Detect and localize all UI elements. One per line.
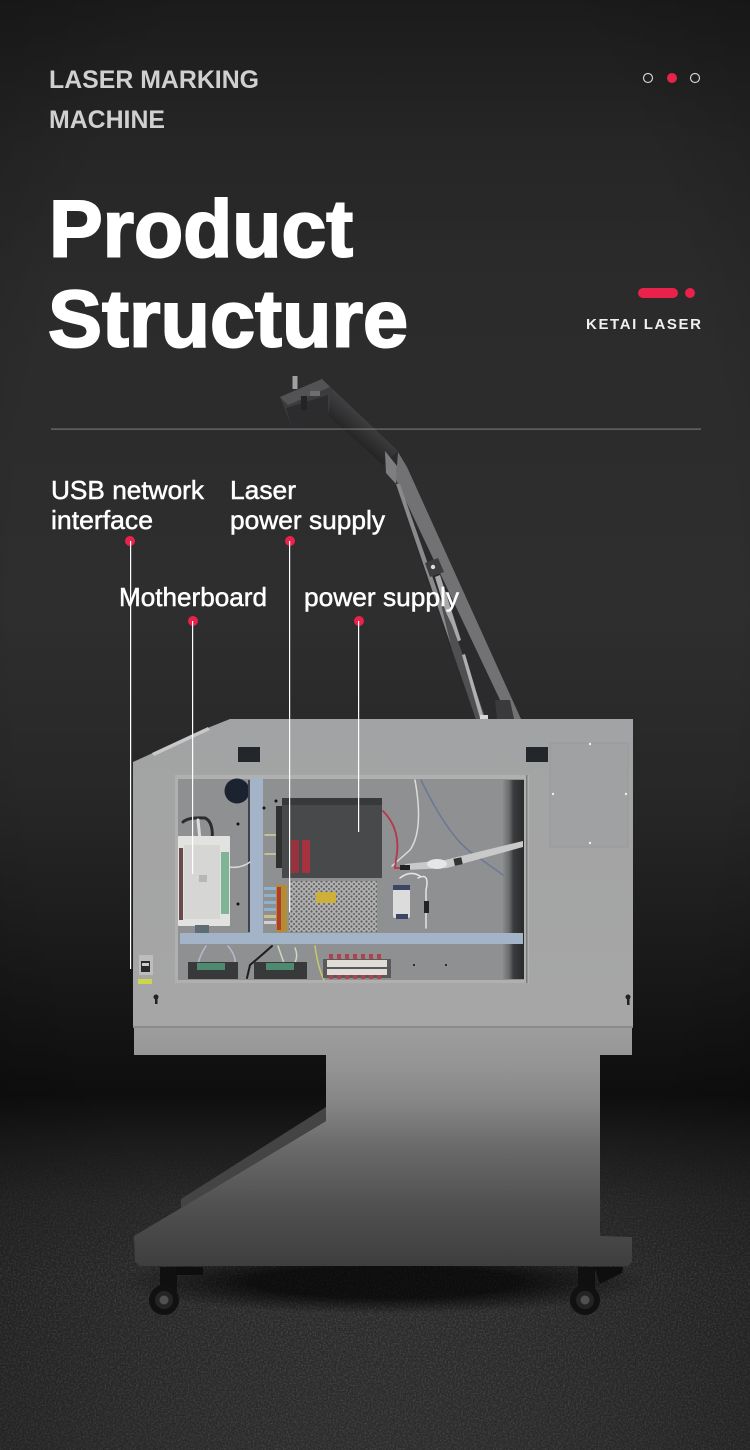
small driver module — [393, 885, 429, 919]
laser power supply component — [276, 798, 382, 878]
pagination dots — [644, 73, 700, 83]
main title: Product — [49, 184, 353, 274]
callout: USB network interface — [51, 475, 205, 969]
brand mark — [586, 288, 701, 333]
switching power supply component — [264, 881, 377, 932]
callout: Motherboard — [119, 582, 267, 874]
callout: power supply: power supply — [304, 582, 459, 612]
callout: Laser power supply: Laser — [230, 475, 296, 505]
callout: USB network interface: USB network — [51, 475, 205, 505]
wires — [183, 780, 503, 980]
lower boards and terminal block — [188, 954, 391, 979]
machine lid arm — [280, 376, 521, 720]
callout: USB network interface: interface — [51, 505, 153, 535]
motherboard component — [178, 836, 230, 933]
small heading: MACHINE — [49, 106, 165, 134]
usb network port — [138, 955, 153, 984]
callout: Motherboard: Motherboard — [119, 582, 267, 612]
small heading — [49, 66, 259, 134]
callout: power supply — [304, 582, 459, 832]
laser cable — [405, 841, 523, 870]
control compartment — [175, 775, 529, 983]
callout: Laser power supply: power supply — [230, 505, 385, 535]
machine: laser marking machine illustration — [133, 376, 633, 1315]
machine base — [134, 1028, 632, 1266]
divider line — [51, 428, 701, 430]
small heading: LASER MARKING — [49, 66, 259, 94]
main title — [48, 184, 408, 364]
callout: Laser power supply — [230, 475, 385, 912]
main title: Structure — [48, 274, 408, 364]
machine casters — [149, 1267, 623, 1315]
machine cabinet body — [133, 719, 633, 1028]
brand mark: KETAI LASER — [586, 316, 701, 333]
